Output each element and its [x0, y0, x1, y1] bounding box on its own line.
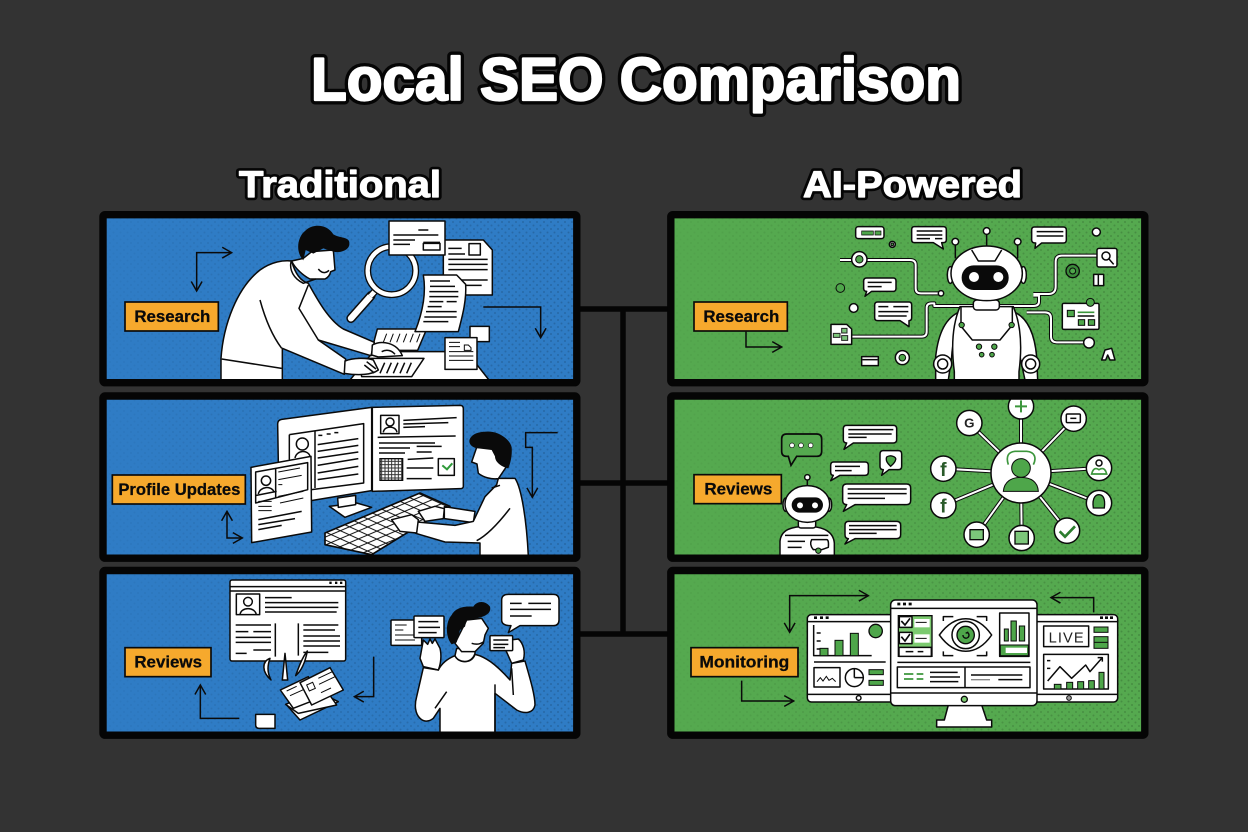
panel: AI-Powered monitoring	[671, 570, 1145, 735]
label: Monitoring: Monitoring	[699, 653, 789, 672]
arrow: documents down	[483, 307, 541, 338]
label: Profile Updates	[112, 475, 245, 504]
illustration: right monitor	[372, 405, 463, 491]
connector between columns	[578, 309, 670, 634]
illustration: stack of review cards	[280, 668, 343, 720]
illustration: right dashboard screen	[1028, 615, 1118, 702]
illustration: small robot	[780, 475, 834, 556]
panel: AI-Powered reviews	[671, 394, 1145, 558]
illustration: monitor stand	[937, 705, 992, 727]
icon: typing bubble	[782, 434, 822, 465]
panel: Traditional reviews	[103, 570, 577, 735]
illustration: monitor stand	[329, 495, 372, 517]
illustration: notes in hands	[391, 616, 513, 651]
diagram: network spokes highlight	[943, 406, 1099, 538]
icon: magnifying glass	[351, 247, 416, 318]
title: Local SEO Comparison	[311, 46, 961, 113]
illustration: right dashboard screen: LIVE	[1049, 630, 1084, 646]
heading: Traditional: Traditional	[239, 164, 441, 205]
arrow: research up and right	[197, 253, 232, 291]
icon: document node	[831, 324, 852, 344]
heading: AI-Powered: AI-Powered	[803, 164, 1022, 205]
label: Reviews: Reviews	[134, 653, 202, 672]
panel: AI-Powered research	[671, 215, 1145, 383]
diagram: outer network nodes	[931, 394, 1112, 551]
panel frame	[671, 570, 1145, 735]
panel frame	[103, 215, 577, 383]
illustration: browser window	[230, 580, 346, 661]
arrow: label down-right	[742, 681, 794, 701]
diagram: outer network nodes: f	[940, 497, 947, 518]
arrow: short two-way	[227, 511, 242, 538]
panel frame	[671, 396, 1145, 558]
heading: AI-Powered: AI-Powered	[803, 164, 1022, 205]
diagram: outer network nodes: f	[940, 460, 947, 481]
icon: search node	[1097, 248, 1117, 267]
illustration: stacked documents	[389, 221, 492, 369]
illustration: central monitor	[891, 600, 1037, 706]
illustration: left dashboard screen	[807, 615, 897, 702]
illustration: reviews rising to window	[264, 651, 307, 680]
illustration: person typing	[221, 226, 402, 380]
icon: speech bubble	[502, 594, 559, 633]
illustration: person holding reviews	[415, 602, 535, 733]
icon: data card	[1062, 298, 1099, 329]
arrow: top right loop	[1051, 598, 1094, 612]
label: Research	[694, 302, 787, 331]
title: Local SEO Comparison	[311, 46, 961, 113]
label: Reviews	[125, 648, 211, 677]
illustration: tablet	[251, 456, 312, 543]
panel frame	[103, 396, 577, 558]
label: Reviews: Reviews	[704, 480, 772, 499]
arrow: loop left	[790, 596, 868, 632]
illustration: circuit wires	[840, 252, 1098, 348]
arrow: up to label	[200, 685, 239, 718]
label: Reviews	[694, 475, 781, 504]
arrow: to review cards	[354, 657, 374, 697]
illustration: robot	[934, 228, 1040, 380]
icons: speech bubbles	[856, 227, 1066, 327]
panel: Traditional profile updates	[103, 396, 577, 558]
arrow: from label	[746, 332, 782, 347]
diagram: central profile node	[991, 443, 1051, 503]
icons: review speech bubbles	[831, 425, 911, 544]
label: Profile Updates: Profile Updates	[118, 480, 240, 499]
illustration: keyboard	[325, 493, 450, 555]
illustration: person at keyboard	[392, 432, 528, 556]
illustration: desk and keyboards	[350, 329, 489, 380]
diagram: outer network nodes: G	[964, 415, 975, 430]
label: Research: Research	[703, 307, 779, 326]
label: Research: Research	[134, 307, 210, 326]
arrow: right and down	[526, 433, 558, 497]
panel frame	[103, 570, 577, 735]
label: Research	[125, 302, 218, 331]
label: Monitoring	[691, 648, 798, 677]
diagram: network spokes	[943, 406, 1099, 538]
icons: small nodes and cards	[836, 228, 1115, 366]
panel: Traditional research	[103, 215, 577, 383]
heading: Traditional: Traditional	[239, 164, 441, 205]
panel frame	[671, 215, 1145, 383]
icon: sticky note	[256, 714, 275, 728]
illustration: left monitor	[278, 407, 372, 505]
